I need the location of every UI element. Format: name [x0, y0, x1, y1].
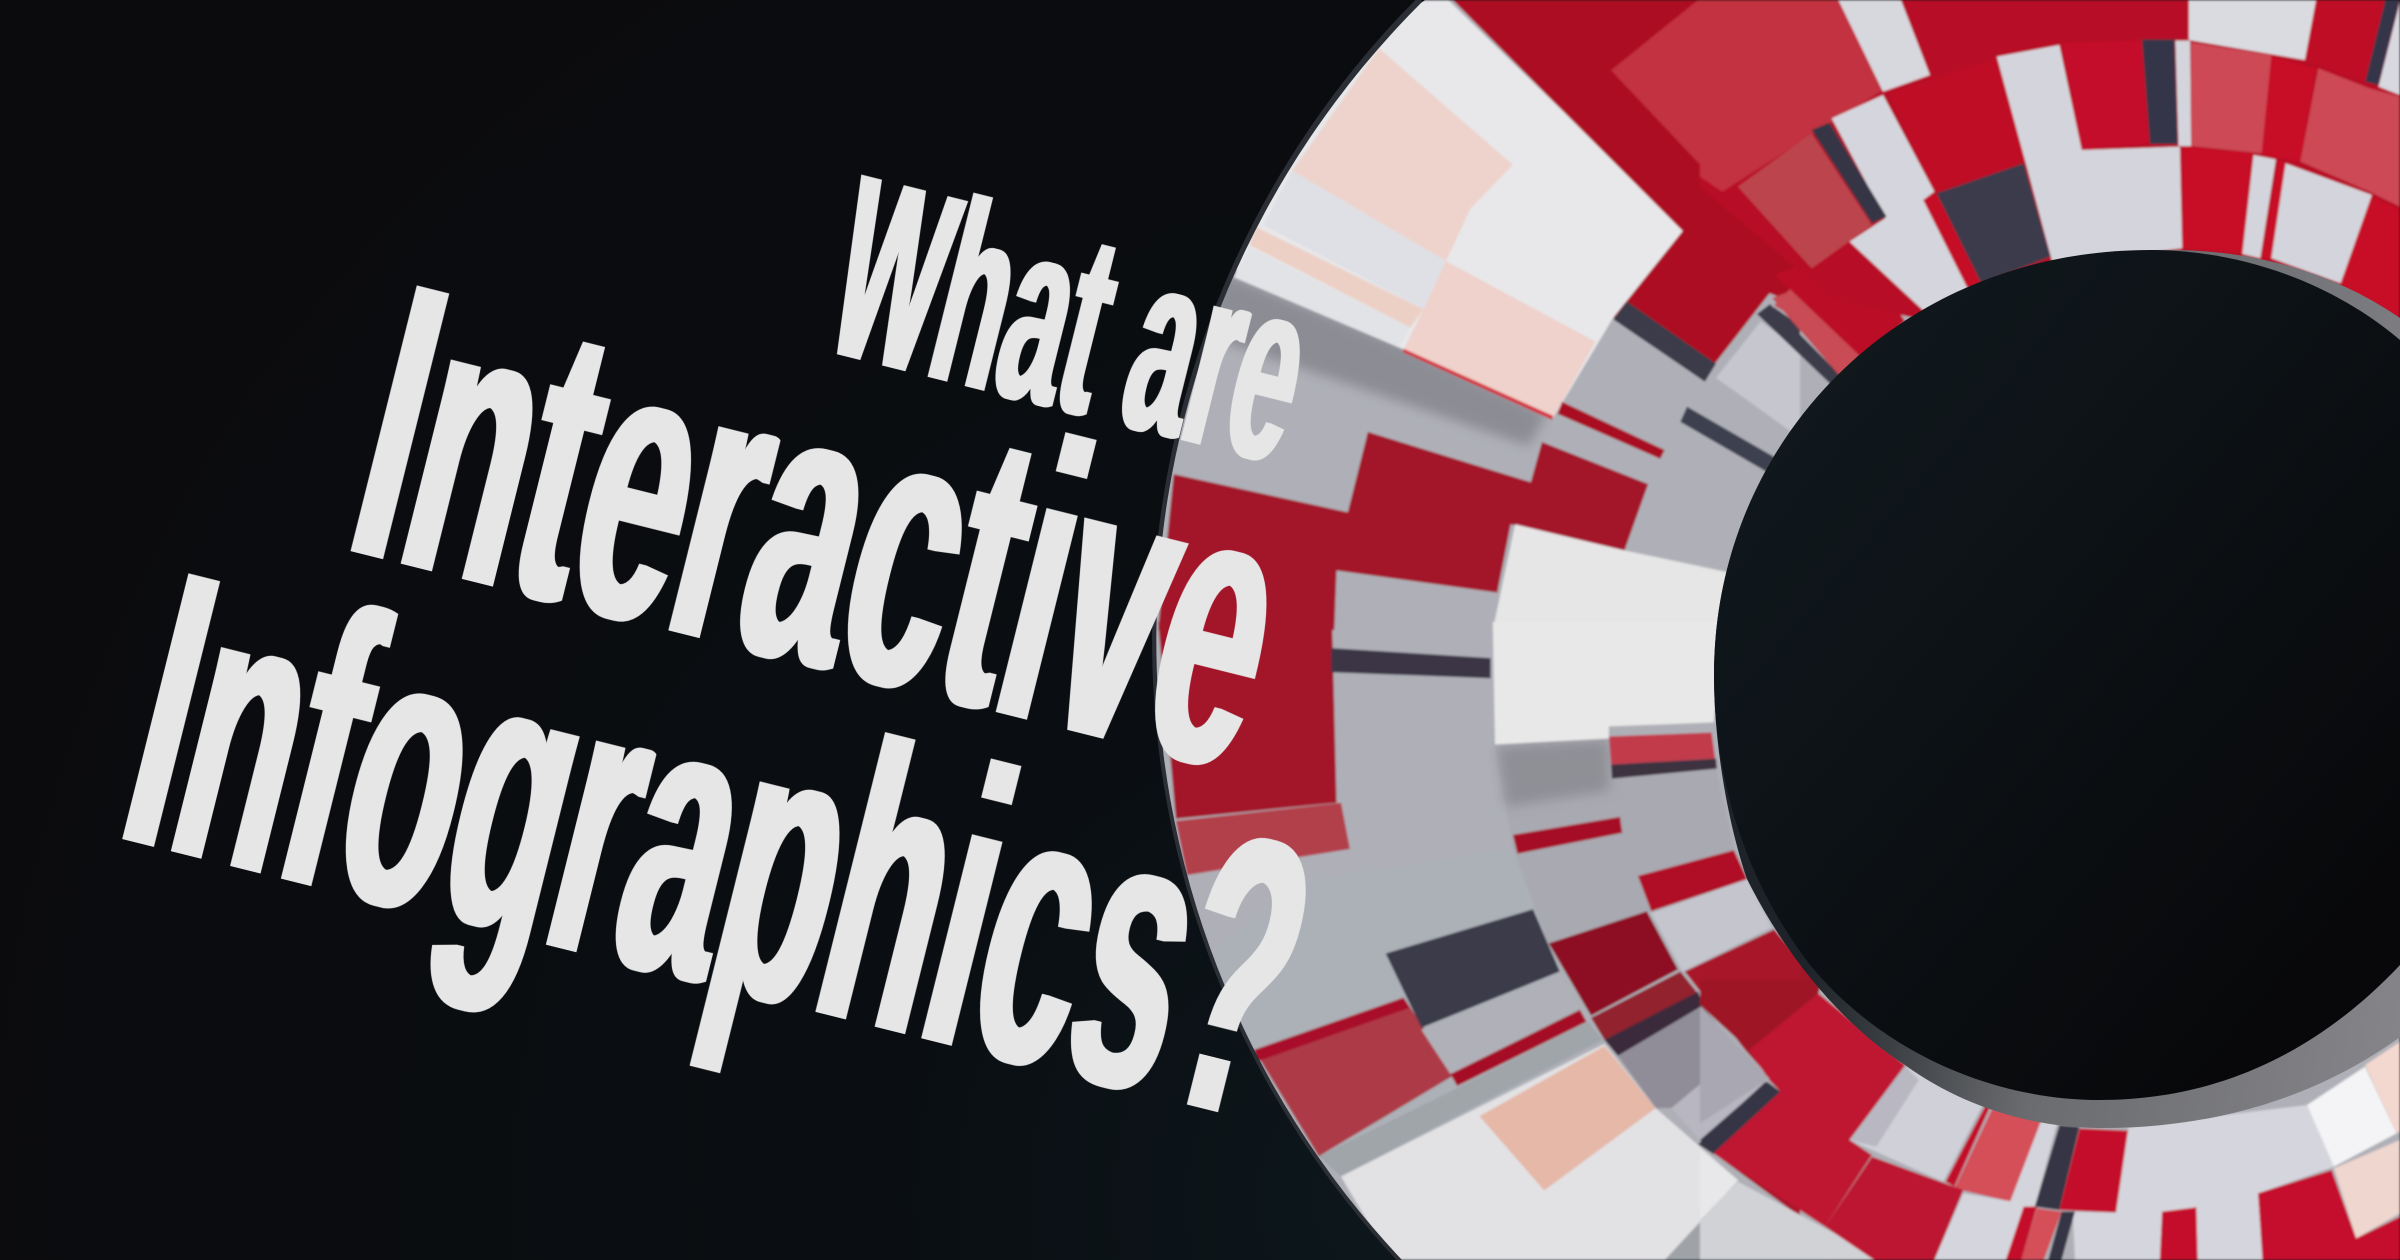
tiles: connecting inner band: [1756, 268, 1906, 384]
hole wall: [1714, 250, 2400, 1128]
tiles: lower left of disc: [1158, 622, 1800, 1260]
panel: segmented disc: [1100, 0, 2400, 1260]
title: [93, 120, 1346, 1207]
tiles: top of disc: [1700, 0, 2400, 320]
title: Interactive: [321, 201, 1322, 854]
tiles: upper left of disc: [1158, 0, 1800, 630]
central dark hole: [1714, 250, 2400, 1100]
infographic canvas: What are: [806, 120, 1335, 519]
outer rim of disc: [1156, 0, 1421, 1260]
tiles: bottom of disc: [1700, 940, 2400, 1260]
